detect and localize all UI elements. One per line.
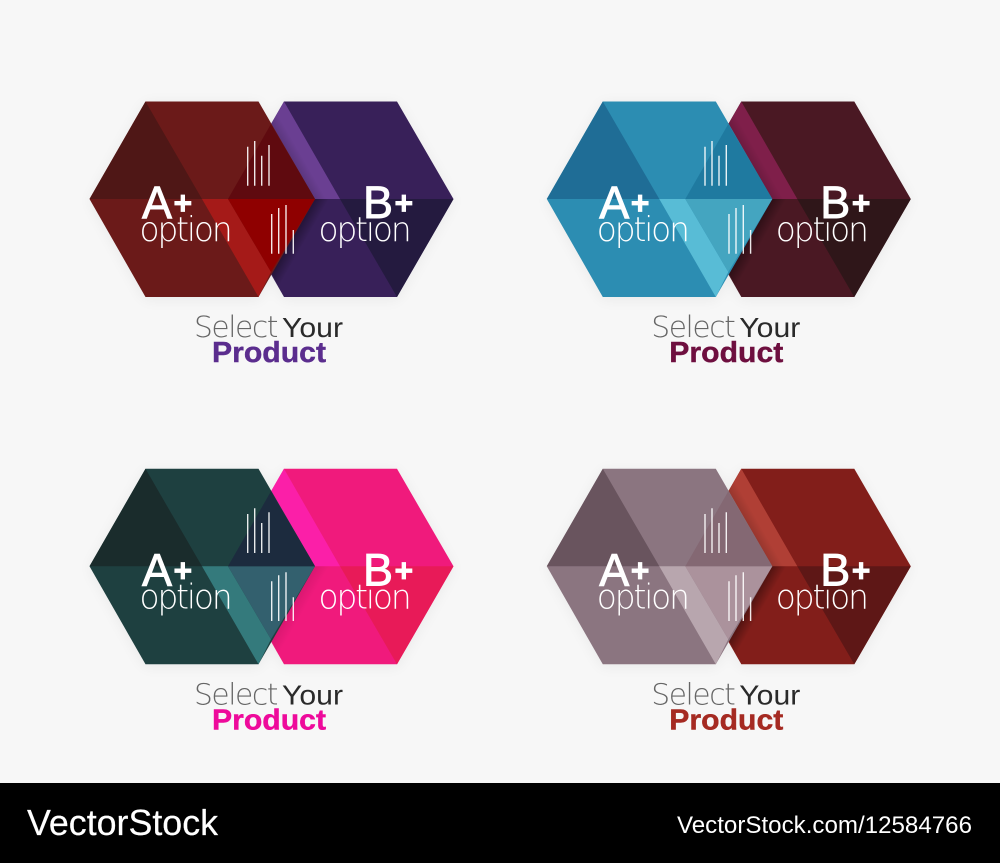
label: A+ option: + — [174, 185, 192, 221]
label: A+ option — [597, 177, 688, 250]
footer image id: VectorStock.com/12584766 — [677, 812, 972, 839]
label: B+ option: + — [394, 552, 413, 588]
panel: teal and pink option pair — [90, 469, 454, 736]
label: B+ option: option — [776, 210, 867, 250]
label: B+ option: + — [394, 185, 413, 221]
caption: Product — [669, 337, 784, 369]
hexagon B — [228, 469, 454, 664]
caption — [194, 310, 343, 369]
bars: lower chart — [272, 572, 293, 621]
panel: purple and dark red option pair — [90, 102, 454, 369]
label: A+ option: + — [174, 552, 192, 588]
caption: Your — [282, 679, 343, 710]
hexagon B — [685, 469, 911, 664]
label: A+ option — [597, 544, 688, 617]
hexagon A — [90, 102, 315, 297]
caption: Product — [212, 704, 326, 736]
label: B+ option — [318, 544, 413, 617]
bars: lower chart — [729, 205, 751, 254]
footer brand: VectorStock — [27, 802, 219, 843]
label: A+ option: option — [597, 577, 688, 617]
bars: upper chart — [705, 508, 726, 553]
label: B+ option: B — [363, 177, 393, 228]
bars: lower chart — [272, 205, 293, 254]
caption: Select — [651, 677, 735, 711]
label: A+ option: option — [597, 210, 688, 250]
label: B+ option — [318, 177, 413, 250]
label: B+ option: + — [852, 552, 870, 588]
caption: Your — [739, 679, 800, 710]
bars: upper chart — [705, 141, 726, 186]
label: B+ option: B — [363, 544, 393, 595]
label: B+ option: option — [318, 210, 410, 250]
label: A+ option: A — [142, 177, 172, 228]
label: A+ option: A — [142, 544, 172, 595]
caption — [651, 677, 800, 736]
hexagon A — [547, 102, 772, 297]
label: B+ option: + — [852, 185, 870, 221]
label: B+ option: B — [820, 544, 850, 595]
label: A+ option: A — [599, 177, 629, 228]
hexagon A — [547, 469, 772, 664]
bars: lower chart — [729, 572, 751, 621]
caption: Your — [282, 312, 343, 343]
panel: blue and maroon option pair — [547, 102, 911, 369]
hexagon B — [685, 102, 911, 297]
panel: mauve and brick red option pair — [547, 469, 911, 736]
label: A+ option: option — [140, 210, 230, 250]
bars: upper chart — [248, 141, 269, 186]
label: B+ option: option — [318, 577, 410, 617]
hexagon A — [90, 469, 315, 664]
caption — [651, 310, 800, 369]
caption: Product — [212, 337, 326, 369]
caption: Select — [194, 677, 278, 711]
caption — [194, 677, 343, 736]
caption: Your — [739, 312, 800, 343]
caption: Select — [194, 310, 278, 344]
label: B+ option — [776, 177, 870, 250]
label: B+ option — [776, 544, 870, 617]
label: A+ option: + — [631, 552, 649, 588]
label: B+ option: B — [820, 177, 850, 228]
hexagon B — [228, 102, 454, 297]
caption: Product — [669, 704, 784, 736]
label: A+ option: A — [599, 544, 629, 595]
label: A+ option: option — [140, 577, 230, 617]
label: A+ option — [140, 544, 230, 617]
bars: upper chart — [248, 508, 269, 553]
caption: Select — [651, 310, 735, 344]
label: A+ option — [140, 177, 230, 250]
footer bar — [0, 783, 1000, 863]
label: A+ option: + — [631, 185, 649, 221]
label: B+ option: option — [776, 577, 867, 617]
